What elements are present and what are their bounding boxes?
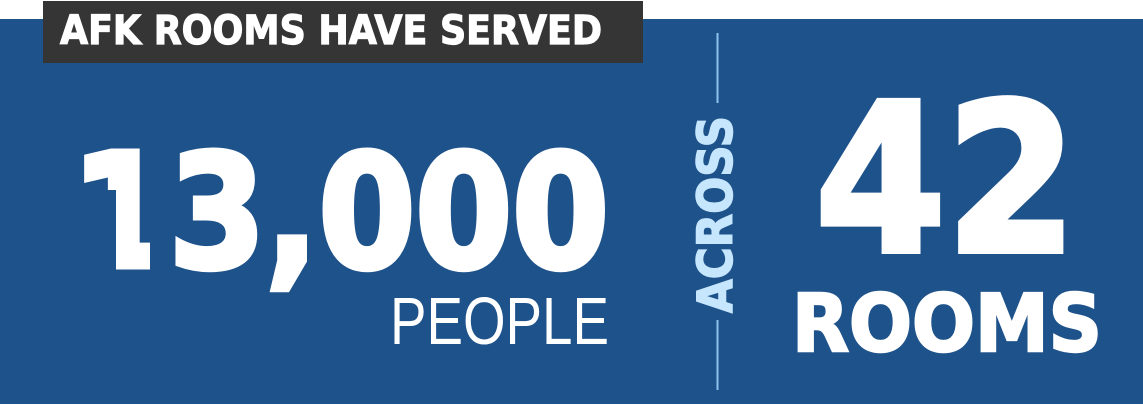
stat: people served: 13,000 [72, 122, 609, 305]
stat: rooms: ROOMS [792, 278, 1102, 370]
stat: people served: PEOPLE [390, 284, 609, 359]
divider with label: ACROSS [688, 116, 744, 313]
title banner: AFK ROOMS HAVE SERVED [60, 8, 602, 54]
stat: rooms: 42 [815, 60, 1077, 300]
